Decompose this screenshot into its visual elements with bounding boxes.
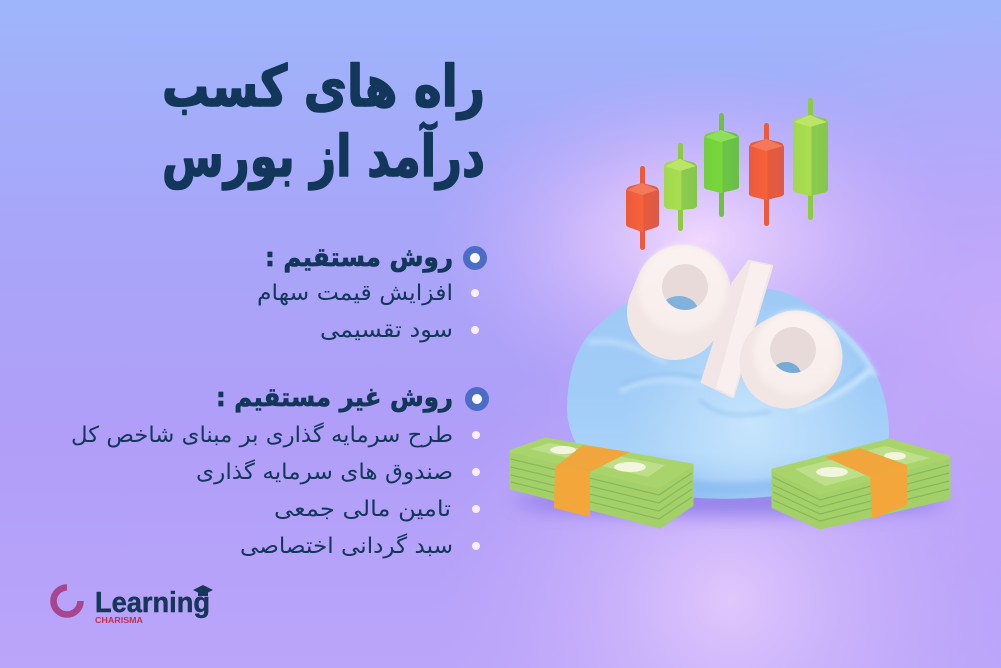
percent ring lower — [754, 311, 838, 395]
illustration: money stack right — [773, 440, 949, 528]
section: direct method — [257, 243, 487, 343]
section: indirect method — [71, 383, 489, 559]
illustration: money stack left — [511, 439, 692, 527]
title: راه های کسب — [162, 54, 485, 120]
title: درآمد از بورس — [162, 121, 485, 190]
logo: Learning Charisma — [54, 585, 213, 625]
icon: heading bullet indirect — [465, 387, 489, 411]
illustration: shadow — [515, 488, 945, 516]
list: indirect method items — [71, 422, 480, 559]
band — [825, 448, 907, 477]
band — [555, 445, 630, 472]
candle 2 lime — [664, 143, 697, 231]
percent ring upper — [639, 245, 727, 333]
icon: logo ring — [54, 588, 80, 614]
list: indirect method items: طرح سرمایه گذاری بر مبنای شاخص کل — [71, 422, 453, 448]
bag creases — [590, 322, 875, 488]
candle 5 lime — [793, 98, 828, 220]
heading: indirect method: روش غیر مستقیم : — [216, 383, 453, 413]
candle 1 red — [626, 166, 659, 250]
icon: graduation cap — [193, 585, 213, 596]
list: direct method items: افزایش قیمت سهام — [257, 281, 453, 306]
heading: direct method: روش مستقیم : — [265, 243, 453, 273]
illustration: blue bean bag — [567, 287, 889, 499]
list: direct method items — [257, 281, 479, 343]
title — [162, 54, 485, 190]
list: indirect method items: تامین مالی جمعی — [274, 497, 451, 522]
logo wordmark: Learning — [95, 587, 210, 619]
icon: heading bullet direct — [463, 246, 487, 270]
list: indirect method items: صندوق های سرمایه گذاری — [196, 459, 453, 485]
list: indirect method items: سبد گردانی اختصاصی — [240, 533, 453, 559]
list: direct method items: سود تقسیمی — [320, 318, 453, 343]
illustration: percent sign — [639, 245, 838, 397]
logo subtitle: CHARISMA — [95, 615, 143, 625]
percent slash — [702, 261, 772, 397]
candle 3 green — [704, 113, 739, 217]
candle 4 red — [749, 123, 784, 226]
illustration: candlestick chart — [626, 98, 828, 250]
